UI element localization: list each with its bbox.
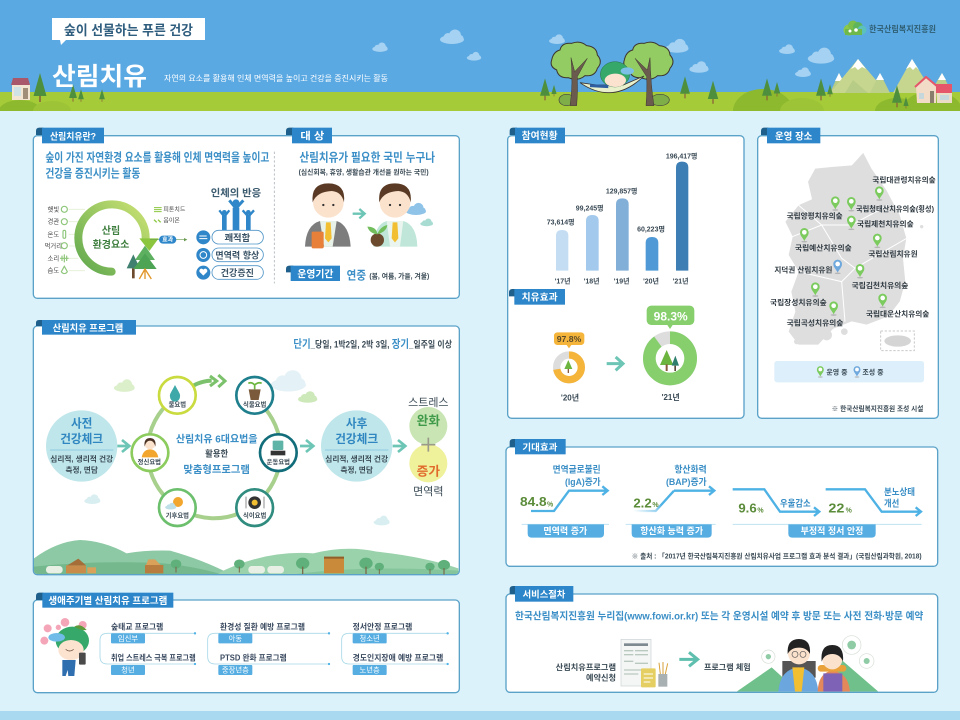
circle: pre health check: 건강체크 xyxy=(60,432,103,446)
main title: 산림치유 xyxy=(52,63,147,91)
list: body reactions: 쾌적함 xyxy=(224,232,251,243)
tab: target xyxy=(286,128,332,143)
note: source: ※ 출처 : 「2017년 한국산림복지진흥원 산림치유사업 프로그램 효과 분석 결과」(국립산림과학원, 2018) xyxy=(632,551,922,560)
program group: pregnant and young: 임신부 xyxy=(118,634,138,643)
bar chart: participants by year: '21년 xyxy=(673,276,689,285)
donut chart: 2021: '21년 xyxy=(662,392,680,402)
outcome: stress relief and immunity increase: 면역력 xyxy=(413,485,443,498)
label: negative emotion stabilization xyxy=(733,524,922,538)
bar chart: participants by year: '17년 xyxy=(555,276,571,285)
tab: participation: 참여현황 xyxy=(522,130,558,142)
outcome: stress relief and immunity increase: 완화 xyxy=(417,414,440,428)
effect: depression reduction xyxy=(733,489,819,516)
program group: child and middle-aged: 환경성 질환 예방 프로그램 xyxy=(220,622,305,632)
icon: raised-arm people xyxy=(219,199,254,230)
speech bubble title: 숲이 선물하는 푸른 건강 xyxy=(64,23,194,38)
tab: participation xyxy=(510,128,565,143)
tab: life-cycle xyxy=(36,593,173,608)
outcome: stress relief and immunity increase xyxy=(408,396,449,498)
effect: IgA: 면역글로불린 xyxy=(553,463,601,474)
program group: teen and elderly xyxy=(342,622,449,675)
effect: IgA: (IgA)증가 xyxy=(565,476,601,487)
tab: expected effects: 기대효과 xyxy=(522,441,558,452)
chart: forest environment ring xyxy=(69,204,159,279)
village buildings xyxy=(46,557,450,575)
map labels: 국립곡성치유의숲 xyxy=(787,318,844,327)
panel: life-cycle programs xyxy=(33,593,459,693)
arrow: post check to outcome xyxy=(393,440,405,452)
bar chart: participants by year: '19년 xyxy=(614,276,630,285)
illustration: hammock and trees xyxy=(551,42,673,106)
circle: pre health check xyxy=(46,410,117,482)
circle: post health check: 측정, 면담 xyxy=(340,465,373,475)
bar chart: participants by year: 196,417명 xyxy=(666,151,698,160)
hills left xyxy=(0,100,71,111)
effect: BAP: 2.2 xyxy=(633,495,652,510)
label: negative emotion stabilization: 부정적 정서 안정 xyxy=(801,525,863,536)
program group: teen and elderly: 노년층 xyxy=(360,666,380,675)
list: body reactions: 면역력 향상 xyxy=(215,249,260,260)
speech bubble title xyxy=(52,18,205,45)
logo: 한국산림복지진흥원 xyxy=(869,24,936,34)
icon: application document xyxy=(621,639,668,687)
text: apply: 산림치유프로그램 xyxy=(556,662,616,672)
badge: effect xyxy=(150,236,187,244)
bar chart: participants by year xyxy=(547,151,698,285)
arrow: therapies to post check xyxy=(300,440,313,452)
program group: pregnant and young: 청년 xyxy=(121,666,135,675)
program group: child and middle-aged: PTSD 완화 프로그램 xyxy=(220,653,287,663)
circle: post health check: 건강체크 xyxy=(335,432,378,446)
badge: effect: 효과 xyxy=(162,236,174,244)
map labels xyxy=(770,175,936,327)
effect: IgA xyxy=(520,463,609,538)
program group: child and middle-aged: 아동 xyxy=(229,634,242,643)
effect: IgA: 84.8 xyxy=(520,494,547,509)
list: phytoncide and anion: 피톤치드 xyxy=(163,205,186,213)
panel: service procedure xyxy=(506,586,938,692)
text: six therapies center: 산림치유 6대요법을 xyxy=(176,432,258,445)
list: body reactions: 건강증진 xyxy=(221,268,254,278)
bar chart: participants by year: 99,245명 xyxy=(576,203,604,212)
icon: left house xyxy=(11,78,30,100)
node: climate therapy: 기후요법 xyxy=(166,510,189,519)
chart: forest environment ring: 산림 xyxy=(102,224,120,237)
header banner xyxy=(0,0,960,111)
ring: six therapies xyxy=(147,375,281,518)
list: environment factors: 먹거리 xyxy=(45,241,62,250)
icon: person after xyxy=(367,183,433,247)
effect: BAP: 항산화력 xyxy=(674,463,707,474)
node: mental therapy: 정신요법 xyxy=(138,457,161,466)
effect: BAP: 항산화 능력 증가 xyxy=(640,525,704,536)
circle: pre health check: 사전 xyxy=(71,417,92,430)
tab: expected effects xyxy=(510,439,566,454)
arrow: apply to experience xyxy=(679,652,698,666)
map labels: 국립김천치유의숲 xyxy=(852,281,909,290)
donut chart: 2021: 98.3% xyxy=(654,309,688,323)
circle: pre health check: 측정, 면담 xyxy=(65,465,98,475)
map labels: 국립산림치유원 xyxy=(868,249,918,258)
legend xyxy=(774,361,924,382)
tab: operation period: 운영기간 xyxy=(297,268,333,281)
map: South Korea xyxy=(785,152,923,351)
illustration: hikers xyxy=(737,636,878,692)
text: six therapies center: 맞춤형프로그램 xyxy=(183,463,250,476)
effect: anger improvement: 개선 xyxy=(884,498,899,509)
circle: pre health check: 심리적, 생리적 건강 xyxy=(50,454,113,464)
bar chart: participants by year: 60,223명 xyxy=(637,225,665,234)
circle: post health check: 심리적, 생리적 건강 xyxy=(325,454,388,464)
arrow: 2020 to 2021 xyxy=(607,357,623,370)
legend: 조성 중 xyxy=(862,368,884,377)
text: year-round: 연중 xyxy=(347,268,366,282)
effect: IgA: 면역력 증가 xyxy=(543,525,588,536)
list: phytoncide and anion: 음이온 xyxy=(163,217,180,225)
tab: service procedure xyxy=(510,586,573,602)
panel: expected effects xyxy=(506,439,938,566)
map labels: 국립장성치유의숲 xyxy=(770,298,827,307)
chart: forest environment ring: 환경요소 xyxy=(93,238,129,251)
node: plant therapy xyxy=(236,377,273,414)
program group: child and middle-aged xyxy=(208,622,330,675)
list: body reactions xyxy=(196,230,263,280)
bar chart: participants by year: 73,614명 xyxy=(547,217,575,226)
list: environment factors: 경관 xyxy=(48,217,59,226)
list: environment factors: 습도 xyxy=(48,266,59,275)
effect: anger improvement xyxy=(826,486,921,516)
list: environment factors: 소리 xyxy=(48,253,59,262)
circle: post health check xyxy=(321,410,392,482)
map labels: 국립제천치유의숲 xyxy=(857,220,914,229)
tab: what is forest therapy: 산림치유란? xyxy=(50,130,96,141)
effect: BAP: (BAP)증가 xyxy=(666,476,707,487)
effect: anger improvement: 22 xyxy=(828,500,844,515)
tab: service procedure: 서비스절차 xyxy=(523,589,566,600)
text: target detail: (심신회복, 휴양, 생활습관 개선을 원하는 국민) xyxy=(299,167,429,176)
bottom strip xyxy=(0,711,960,720)
text: experience: 프로그램 체험 xyxy=(704,662,751,672)
donut chart: 2020: 97.8% xyxy=(557,334,582,344)
clouds xyxy=(84,370,390,525)
map pins xyxy=(800,186,887,316)
node: water therapy xyxy=(159,377,196,414)
tab: life-cycle: 생애주기별 산림치유 프로그램 xyxy=(48,595,167,607)
donut chart: 2020 xyxy=(554,332,584,403)
node: exercise therapy: 운동요법 xyxy=(267,457,290,466)
effect: depression reduction: 우울감소 xyxy=(780,497,811,508)
bar chart: participants by year: '18년 xyxy=(584,276,600,285)
effect: BAP xyxy=(626,463,716,538)
tab: what is forest therapy xyxy=(36,128,104,143)
list: environment factors: 햇빛 xyxy=(48,204,59,213)
text: six therapies center xyxy=(176,432,258,476)
logo xyxy=(844,20,936,36)
program group: pregnant and young: 숲태교 프로그램 xyxy=(111,622,163,632)
small conifers xyxy=(34,73,909,108)
arrow: pre check to therapies xyxy=(117,440,129,452)
arrow: before to after xyxy=(353,209,365,218)
heading: definition: 건강을 증진시키는 활동 xyxy=(45,165,140,180)
program group: child and middle-aged: 중장년층 xyxy=(222,666,249,675)
node: exercise therapy xyxy=(260,434,297,471)
program group: pregnant and young: 취업 스트레스 극복 프로그램 xyxy=(111,653,196,663)
text: year-round xyxy=(347,268,429,282)
heading: body reaction: 인체의 반응 xyxy=(211,187,262,200)
effect: depression reduction: % xyxy=(757,507,764,514)
legend: 운영 중 xyxy=(826,368,848,377)
circle: post health check: 사후 xyxy=(346,416,368,430)
tab: operation period xyxy=(286,266,340,281)
node: diet therapy: 식이요법 xyxy=(243,510,266,519)
panel: participation and healing effect xyxy=(508,128,744,418)
heading: reservation: 한국산림복지진흥원 누리집(www.fowi.or.kr) 또는 각 운영시설 예약 후 방문 또는 사전 전화·방문 예약 xyxy=(515,610,924,623)
node: plant therapy: 식물요법 xyxy=(243,400,266,409)
map labels: 국립대운산치유의숲 xyxy=(866,310,930,319)
header clouds xyxy=(372,30,834,77)
effect: anger improvement: 분노상태 xyxy=(884,486,915,497)
icon: right house xyxy=(915,77,952,103)
program group: teen and elderly: 경도인지장애 예방 프로그램 xyxy=(353,653,443,663)
text: apply xyxy=(556,662,616,683)
outcome: stress relief and immunity increase: 증가 xyxy=(417,464,440,478)
list: environment factors xyxy=(45,204,69,275)
text: apply: 예약신청 xyxy=(586,673,616,683)
donut chart: 2020: '20년 xyxy=(561,393,579,403)
map labels: 국립예산치유의숲 xyxy=(795,243,852,252)
tab: locations: 운영 장소 xyxy=(775,131,812,143)
tab: program: 산림치유 프로그램 xyxy=(53,322,123,334)
heading: target: 산림치유가 필요한 국민 누구나 xyxy=(299,150,435,165)
text: year-round: (봄, 여름, 가을, 겨울) xyxy=(369,271,429,280)
text: program duration: 단기_당일, 1박2일, 2박 3일, 장기_일주일 이상 xyxy=(293,338,453,351)
effect: anger improvement: % xyxy=(846,507,853,514)
tab: program xyxy=(36,320,136,335)
hills and mountains right xyxy=(733,59,960,111)
text: six therapies center: 활용한 xyxy=(205,449,228,459)
effect: BAP: % xyxy=(652,502,659,509)
bar chart: participants by year: 129,857명 xyxy=(606,186,638,195)
tab: locations xyxy=(761,128,820,143)
map labels: 국립대관령치유의숲 xyxy=(872,175,936,184)
heading: definition xyxy=(45,150,269,180)
map labels: 국립양평치유의숲 xyxy=(787,212,843,221)
panel: operating locations xyxy=(758,128,938,418)
icon: character with flowers xyxy=(40,618,89,676)
subtitle: 자연의 요소를 활용해 인체 면역력을 높이고 건강을 증진시키는 활동 xyxy=(164,73,388,83)
effect: depression reduction: 9.6 xyxy=(738,500,757,515)
list: environment factors: 온도 xyxy=(48,230,59,238)
donut chart: 2021 xyxy=(647,306,694,402)
note: facilities: ※ 한국산림복지진흥원 조성 시설 xyxy=(832,404,923,413)
node: water therapy: 물요법 xyxy=(169,400,186,409)
list: phytoncide and anion xyxy=(154,205,186,225)
program group: teen and elderly: 청소년 xyxy=(360,634,380,643)
tab: healing effect xyxy=(509,289,565,305)
node: diet therapy xyxy=(236,489,273,526)
node: mental therapy xyxy=(132,434,168,471)
map labels: 국립청태산치유의숲(횡성) xyxy=(856,205,935,214)
tab: target: 대 상 xyxy=(300,130,324,143)
panel: what is forest therapy and target xyxy=(33,128,459,298)
icon: person before xyxy=(305,183,351,248)
hills landscape xyxy=(34,540,458,574)
bar chart: participants by year: '20년 xyxy=(643,276,659,285)
map labels: 지덕권 산림치유원 xyxy=(774,265,833,274)
panel: forest therapy program xyxy=(33,320,459,575)
node: climate therapy xyxy=(159,489,196,526)
effect: IgA: % xyxy=(547,501,554,508)
program group: teen and elderly: 정서안정 프로그램 xyxy=(353,622,412,632)
outcome: stress relief and immunity increase: 스트레스 xyxy=(408,396,449,409)
heading: definition: 숲이 가진 자연환경 요소를 활용해 인체 면역력을 높이고 xyxy=(45,150,269,165)
program group: pregnant and young xyxy=(100,622,196,675)
tab: healing effect: 치유효과 xyxy=(522,292,558,304)
